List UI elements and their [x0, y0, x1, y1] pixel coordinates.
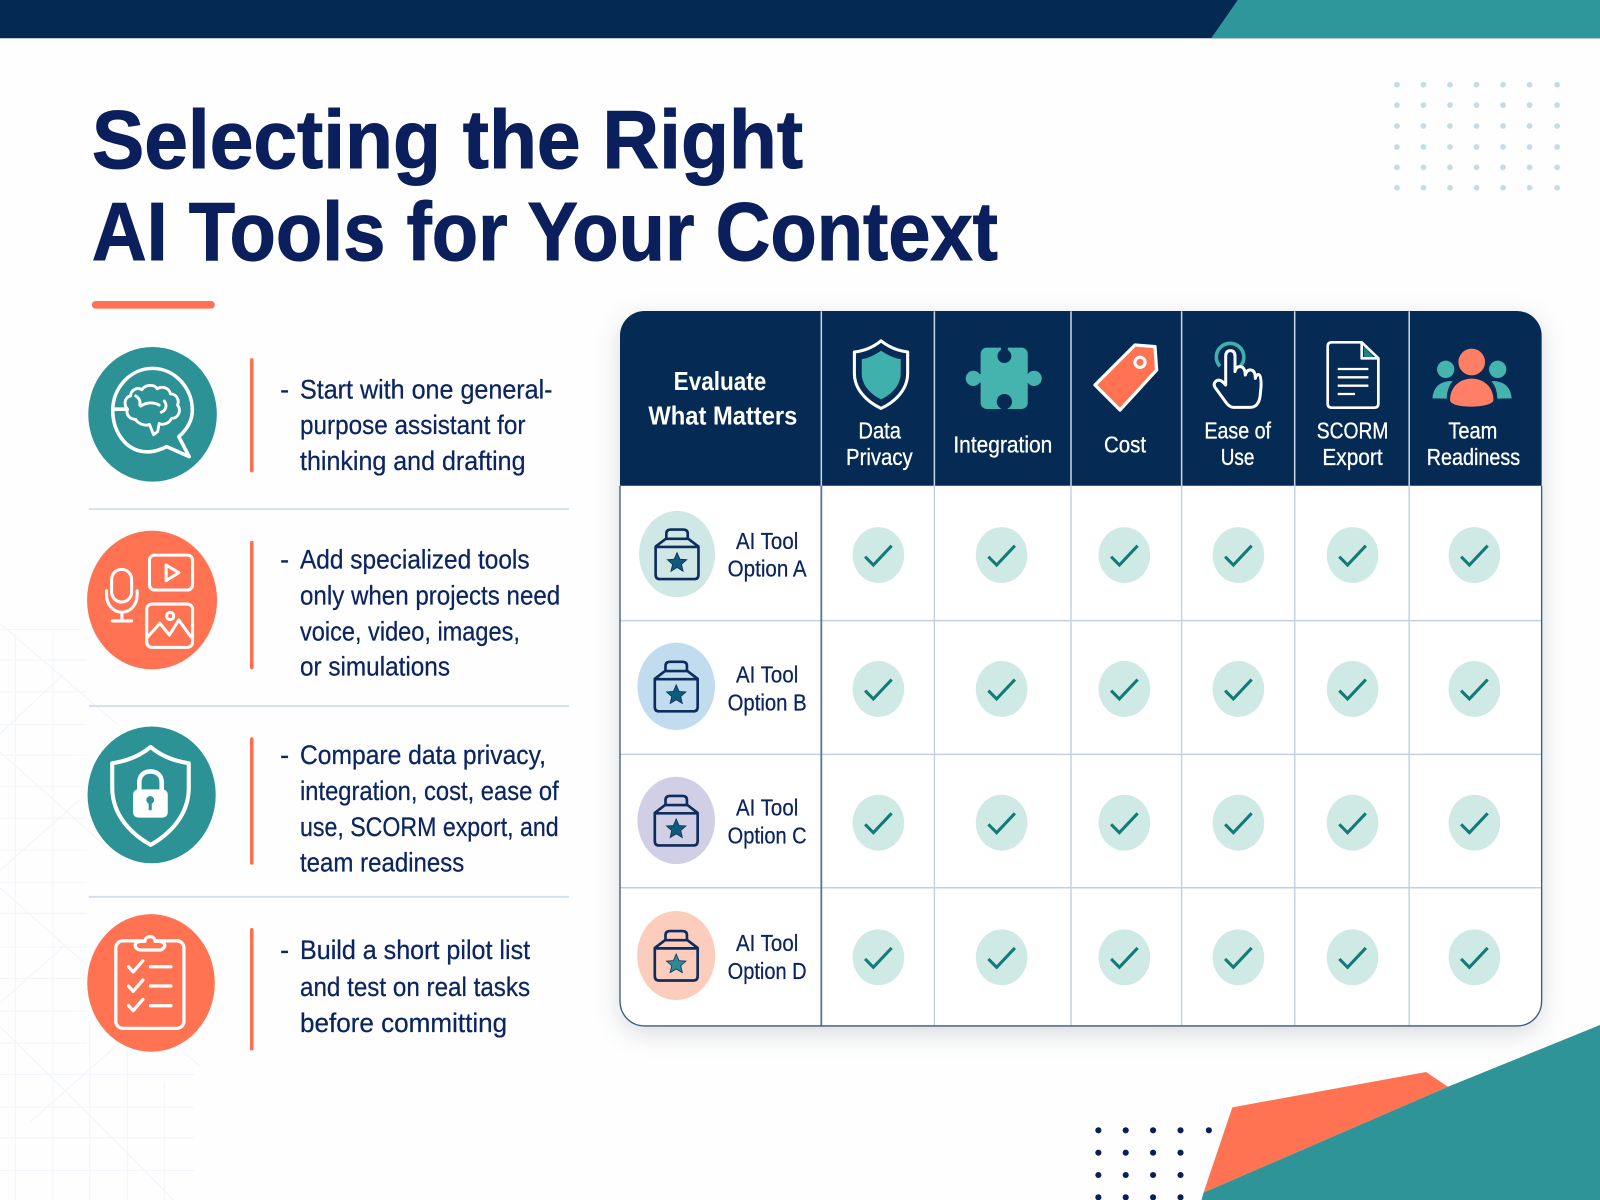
item 1: start with one assistant — [88, 347, 553, 482]
vertical accent — [250, 737, 254, 865]
label — [728, 795, 807, 849]
text block: thinking and drafting — [300, 446, 526, 476]
icon: tool bag D — [637, 911, 715, 1000]
label: Option C — [728, 823, 807, 849]
label — [728, 528, 807, 582]
row: AI Tool Option C — [637, 777, 1500, 864]
checks — [853, 929, 1500, 985]
column: integration — [953, 346, 1052, 458]
checks — [853, 795, 1500, 851]
column: scorm export: SCORM — [1317, 417, 1388, 443]
column: data privacy: Privacy — [846, 444, 913, 470]
column: cost — [1095, 345, 1157, 458]
dot grid: bottom — [1095, 1127, 1212, 1200]
icon: tool bag B — [637, 643, 715, 730]
text block — [280, 374, 553, 476]
label: AI Tool — [736, 930, 798, 956]
label: Option B — [728, 689, 807, 715]
title underline — [92, 301, 215, 309]
text block: Build a short pilot list — [300, 935, 531, 965]
text block: Compare data privacy, — [300, 740, 546, 770]
row: AI Tool Option D — [637, 911, 1500, 1000]
vertical accent — [250, 541, 254, 669]
table header — [620, 311, 1542, 486]
text block: - — [280, 740, 289, 770]
text block: Start with one general- — [300, 374, 553, 404]
label — [728, 930, 807, 984]
title — [92, 93, 998, 278]
top banner — [0, 0, 1600, 38]
text block: - — [280, 374, 289, 404]
icon: brain in speech bubble — [88, 347, 217, 482]
column: integration: Integration — [953, 432, 1052, 458]
label: AI Tool — [736, 661, 798, 687]
panel: guidance list — [87, 347, 569, 1052]
icon: tool bag C — [637, 777, 715, 864]
column: team readiness: Team — [1448, 417, 1497, 443]
text block: only when projects need — [300, 581, 560, 611]
label: AI Tool — [736, 528, 798, 554]
text block: team readiness — [300, 847, 464, 877]
text block: integration, cost, ease of — [300, 776, 559, 806]
column: data privacy — [846, 341, 913, 470]
checks — [853, 661, 1500, 717]
label — [728, 661, 807, 715]
text block: use, SCORM export, and — [300, 812, 559, 842]
dot grid: top right — [1394, 82, 1560, 191]
column: cost: Cost — [1104, 432, 1146, 458]
item 2: specialized tools — [87, 531, 560, 681]
text block: - — [280, 935, 289, 965]
text block: before committing — [300, 1008, 507, 1038]
vertical accent — [250, 928, 254, 1051]
label: Option D — [728, 958, 807, 984]
column: ease of use: Ease of — [1204, 417, 1271, 443]
column: scorm export: Export — [1322, 444, 1383, 470]
text block: and test on real tasks — [300, 972, 530, 1002]
row: AI Tool Option B — [637, 643, 1500, 730]
label: Option A — [728, 556, 807, 582]
column: ease of use — [1204, 343, 1271, 470]
text block — [280, 740, 559, 877]
column: team readiness: Readiness — [1427, 444, 1520, 470]
panel: comparison table — [620, 311, 1542, 1026]
text block: purpose assistant for — [300, 410, 526, 440]
label: AI Tool — [736, 795, 798, 821]
item 4: pilot list — [87, 914, 531, 1052]
column: team readiness — [1427, 349, 1520, 470]
text block — [280, 545, 560, 681]
heading: evaluate what matters: What Matters — [648, 400, 797, 430]
item 3: compare criteria — [88, 727, 559, 877]
text block — [280, 935, 531, 1038]
vertical accent — [250, 358, 254, 472]
corner shapes: bottom right — [1202, 1025, 1600, 1200]
text block: or simulations — [300, 651, 450, 681]
title: AI Tools for Your Context — [92, 185, 998, 278]
text block: voice, video, images, — [300, 617, 520, 647]
text block: - — [280, 545, 289, 575]
icon: tool bag A — [639, 511, 715, 597]
heading: evaluate what matters — [648, 366, 797, 430]
row: AI Tool Option A — [639, 511, 1500, 597]
column: scorm export — [1317, 342, 1388, 470]
column: data privacy: Data — [858, 417, 902, 443]
checks — [853, 527, 1500, 583]
heading: evaluate what matters: Evaluate — [674, 366, 766, 396]
title: Selecting the Right — [92, 93, 803, 186]
column: ease of use: Use — [1221, 444, 1254, 470]
icon: clipboard checklist — [87, 914, 215, 1052]
text block: Add specialized tools — [300, 545, 530, 575]
icon: shield with lock — [88, 727, 216, 863]
icon: mic, video, image — [87, 531, 217, 669]
